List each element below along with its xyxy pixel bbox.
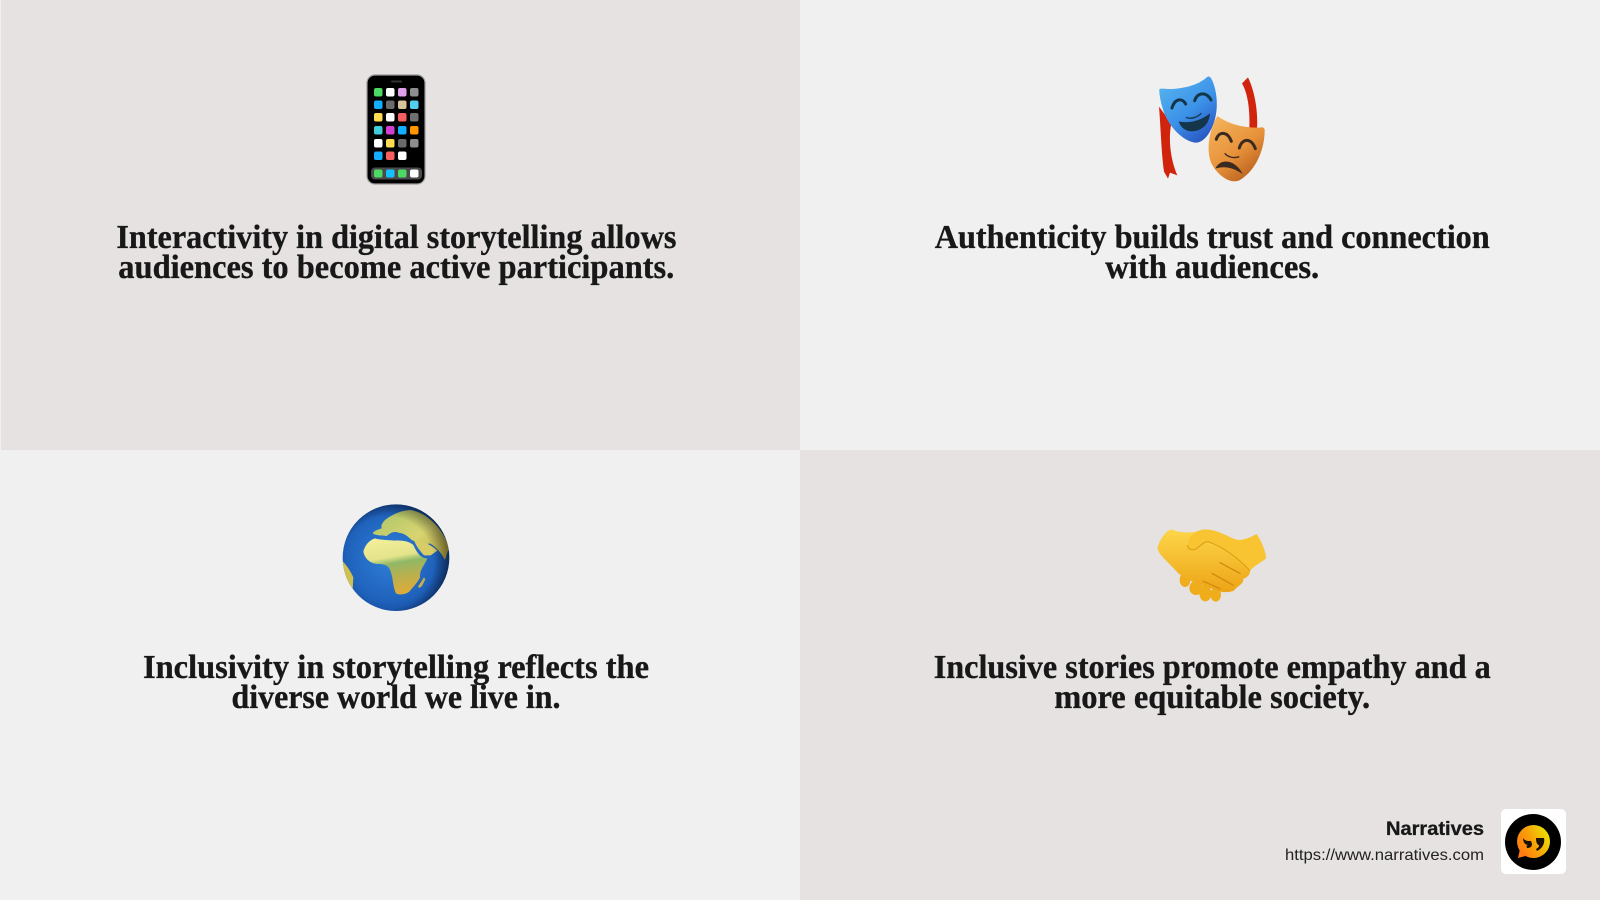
logo (1501, 809, 1566, 874)
text: empathy statement: more equitable society. (1054, 679, 1370, 716)
text: interactivity statement (116, 219, 676, 286)
text: authenticity statement (935, 219, 1490, 286)
brand url: https://www.narratives.com (1285, 847, 1484, 864)
text: inclusivity statement: diverse world we live in. (232, 679, 560, 716)
brand footer (1285, 809, 1566, 874)
panel: empathy (800, 450, 1600, 900)
text: authenticity statement: Authenticity builds trust and connection (935, 219, 1490, 256)
brand name: Narratives (1386, 819, 1484, 840)
text: interactivity statement: Interactivity in digital storytelling allows (116, 219, 676, 256)
text: authenticity statement: with audiences. (1105, 249, 1319, 286)
text: inclusivity statement: Inclusivity in storytelling reflects the (143, 649, 649, 686)
icon: performing arts masks (1159, 76, 1265, 181)
icon: mobile phone (367, 75, 425, 184)
panel: interactivity (1, 0, 800, 450)
icon: handshake (1157, 529, 1266, 602)
icon: globe showing Europe and Africa (342, 504, 449, 611)
text: inclusivity statement (143, 649, 649, 716)
text: interactivity statement: audiences to become active participants. (118, 249, 674, 286)
text: empathy statement (934, 649, 1491, 716)
panel: inclusivity (144, 504, 648, 709)
text: empathy statement: Inclusive stories promote empathy and a (934, 649, 1491, 686)
panel: authenticity (800, 0, 1600, 450)
